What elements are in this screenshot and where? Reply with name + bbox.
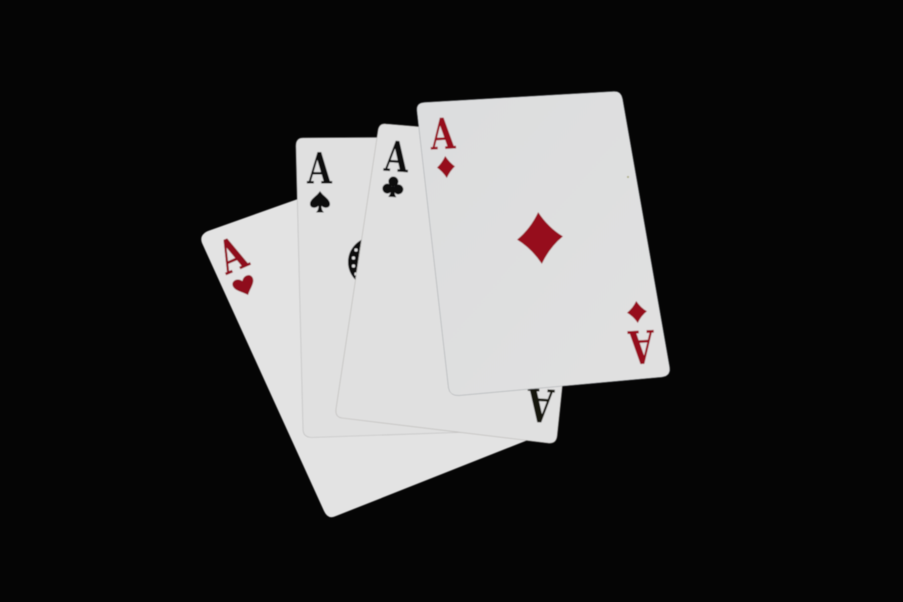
- inverted diamond letter A: A: [626, 318, 656, 374]
- spade letter A: A: [306, 143, 332, 194]
- diamond letter A: A: [428, 107, 457, 160]
- icon: large diamond: [515, 210, 565, 266]
- icon: small diamond: [436, 155, 456, 179]
- icon: inverted small diamond: [626, 300, 648, 324]
- heart letter A: A: [209, 225, 256, 286]
- icon: club: [382, 176, 404, 198]
- card: ace of clubs: [336, 124, 575, 443]
- card: ace of diamonds: [417, 91, 670, 396]
- icon: heart: [231, 274, 258, 299]
- club letter A: A: [382, 131, 411, 183]
- card: ace of hearts: [201, 120, 528, 517]
- icon: spade: [310, 191, 330, 212]
- speck on card: [627, 176, 629, 178]
- icon: ornate central spade fragment: [348, 237, 398, 287]
- card: ace of spades: [296, 137, 470, 438]
- inverted club letter A: A: [525, 377, 556, 433]
